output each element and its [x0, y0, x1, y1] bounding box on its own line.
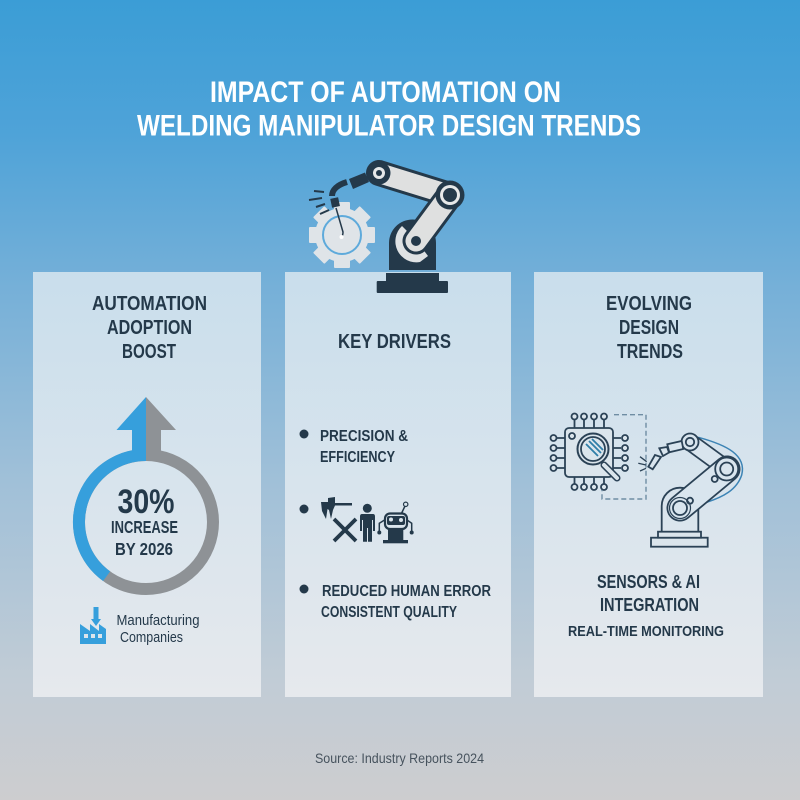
bullet: reduced human error, consistent quality: REDUCED HUMAN ERROR — [322, 583, 491, 600]
connector: dashed link — [602, 415, 646, 499]
heading: evolving design trends: DESIGN — [619, 317, 679, 339]
label: manufacturing companies — [116, 612, 200, 646]
text: sensors and ai integration — [568, 572, 724, 640]
heading: automation adoption boost — [92, 293, 207, 363]
icon: caliper — [321, 497, 352, 519]
title — [137, 76, 641, 142]
stat: 30% increase by 2026: INCREASE — [111, 517, 178, 537]
label: manufacturing companies: Manufacturing — [116, 612, 200, 629]
icon: factory — [80, 607, 106, 644]
title: IMPACT OF AUTOMATION ON — [210, 76, 561, 109]
heading: evolving design trends: EVOLVING — [606, 293, 692, 315]
heading: evolving design trends: TRENDS — [617, 341, 683, 363]
source: Source: Industry Reports 2024 — [315, 750, 484, 766]
panel: key drivers — [285, 272, 511, 697]
heading: automation adoption boost: AUTOMATION — [92, 293, 207, 315]
icon: person — [360, 504, 375, 542]
heading: automation adoption boost: ADOPTION — [107, 317, 192, 339]
icon: cross — [334, 519, 356, 541]
heading: automation adoption boost: BOOST — [122, 341, 176, 363]
text: sensors and ai integration: INTEGRATION — [600, 595, 699, 615]
panel: evolving design trends — [534, 272, 763, 697]
icon: robot arm with cable — [638, 434, 742, 547]
icon: gear — [309, 202, 375, 268]
icon: sensor chip with magnifier — [550, 414, 628, 490]
stat: 30% increase by 2026: 30% — [118, 483, 174, 521]
chart: 30% progress ring with arrow — [79, 397, 213, 589]
heading: key drivers: KEY DRIVERS — [338, 331, 451, 353]
icon: sparks — [309, 191, 329, 214]
panel: automation adoption boost — [33, 272, 261, 697]
bullet: precision and efficiency: EFFICIENCY — [320, 449, 396, 466]
bullet: reduced human error, consistent quality — [300, 583, 491, 621]
icon: welding robot with gear — [309, 162, 464, 293]
text: sensors and ai integration: REAL-TIME MONITORING — [568, 623, 724, 640]
bullet: precision and efficiency: PRECISION & — [320, 428, 408, 445]
text: sensors and ai integration: SENSORS & AI — [597, 572, 700, 592]
bullet: precision and efficiency — [300, 428, 408, 466]
stat: 30% increase by 2026 — [111, 483, 178, 559]
label: manufacturing companies: Companies — [120, 629, 183, 646]
heading: evolving design trends — [606, 293, 692, 363]
title: WELDING MANIPULATOR DESIGN TRENDS — [137, 110, 641, 142]
stat: 30% increase by 2026: BY 2026 — [115, 539, 173, 559]
icon: robot — [377, 502, 414, 543]
icon: robot arm — [330, 162, 464, 293]
bullet: caliper, person and robot icons — [300, 497, 414, 543]
bullet: reduced human error, consistent quality: CONSISTENT QUALITY — [321, 604, 458, 621]
